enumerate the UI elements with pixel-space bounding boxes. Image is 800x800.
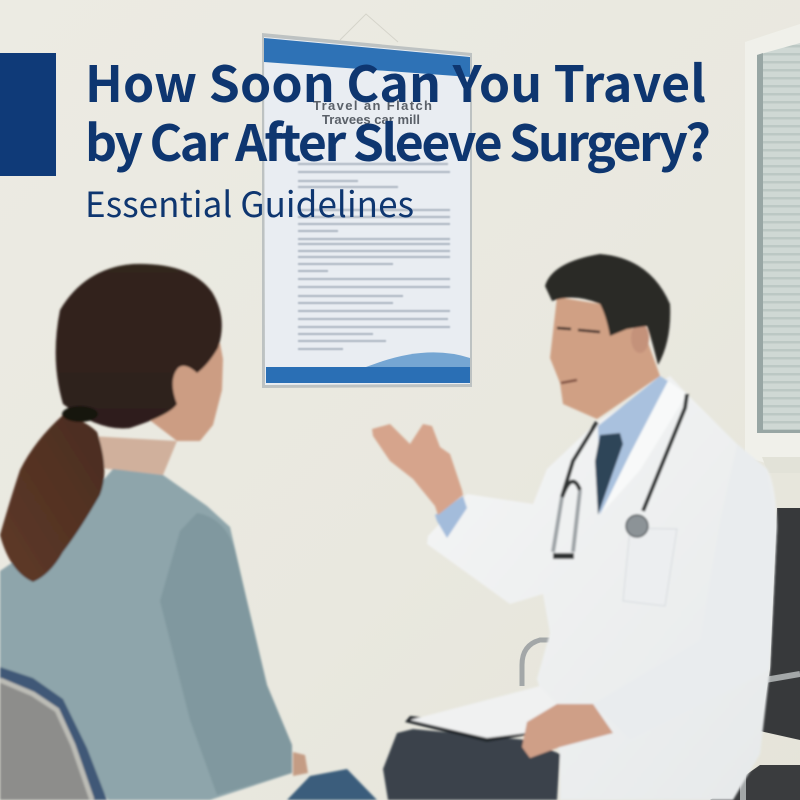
torso (0, 469, 292, 800)
hand (293, 752, 308, 776)
tie (595, 433, 623, 515)
gesturing hand (372, 424, 463, 515)
poster body lines (298, 163, 450, 350)
hair (545, 254, 670, 365)
facial features (557, 328, 600, 383)
doctor (372, 254, 777, 800)
patient (0, 264, 377, 800)
chair (0, 667, 107, 800)
coat (427, 376, 777, 800)
poster heading text: Travel an Flatch (313, 98, 432, 113)
jeans (287, 769, 377, 800)
title: How Soon Can You Travel (85, 45, 706, 117)
title accent block (0, 53, 56, 176)
poster heading text: Travees car mill (322, 112, 420, 127)
stethoscope (553, 394, 687, 556)
face (550, 297, 660, 419)
neck and collar (90, 436, 177, 475)
hair (56, 264, 222, 428)
subtitle: Essential Guidelines (85, 177, 414, 228)
lower hand (522, 704, 613, 758)
trousers (383, 729, 560, 800)
shirt cuff (435, 496, 467, 538)
title: by Car After Sleeve Surgery? (85, 104, 711, 176)
ear (631, 323, 649, 353)
sleeve (160, 513, 292, 795)
face (147, 343, 223, 441)
clipboard (405, 716, 527, 742)
wall poster (262, 14, 472, 388)
shirt (598, 376, 668, 515)
lapel (600, 381, 687, 515)
title (85, 45, 711, 176)
window (745, 24, 800, 473)
poster heading text (313, 98, 432, 127)
coat sleeve shading (593, 444, 777, 740)
doctor chair (522, 508, 800, 800)
ponytail (0, 415, 104, 582)
